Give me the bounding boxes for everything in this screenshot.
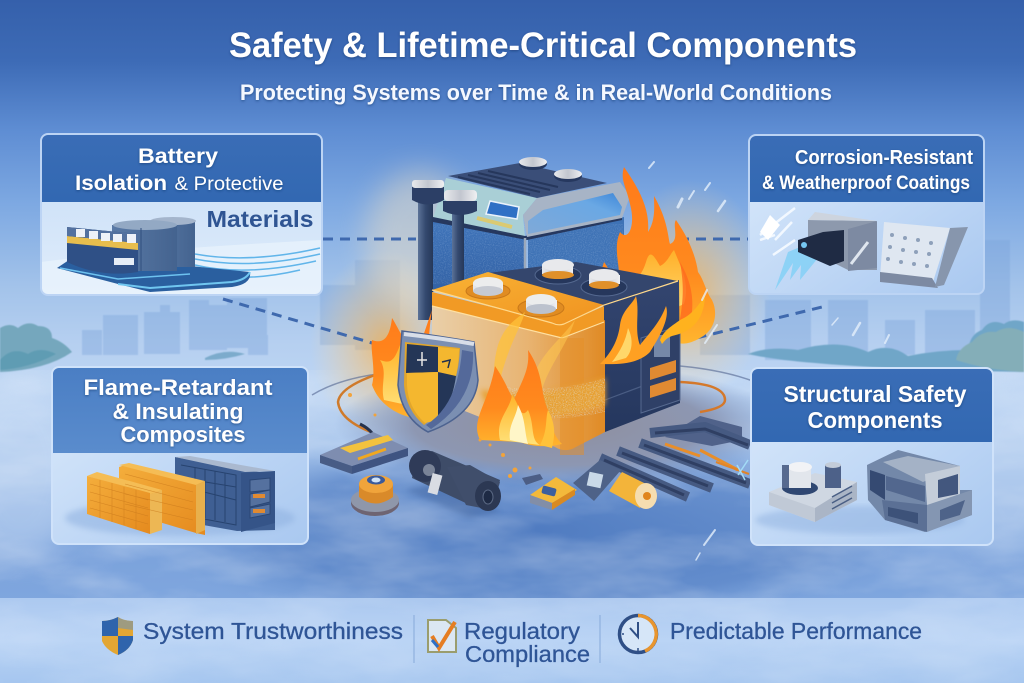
rear battery — [412, 157, 630, 320]
heading — [75, 145, 284, 195]
icon: water spray — [760, 208, 795, 255]
heading — [784, 381, 967, 433]
front battery top — [488, 262, 678, 306]
icon: left safety unit — [769, 473, 857, 522]
heading — [762, 147, 973, 194]
heading: Isolation — [75, 172, 167, 195]
icon: orange insulation panels — [119, 464, 205, 535]
front battery orange faces — [432, 292, 605, 450]
component: cylinder connector — [405, 450, 501, 518]
heading: Flame-Retardant — [84, 375, 273, 400]
benefit: system trustworthiness — [102, 617, 403, 655]
shield — [398, 331, 478, 432]
icon: grey connector box — [808, 220, 877, 270]
icon: perforated plate — [880, 222, 950, 285]
heading: & Protective — [174, 174, 284, 195]
icon: navy composite block — [175, 457, 275, 531]
ground shadow disc — [335, 363, 785, 487]
flames behind front battery — [584, 167, 715, 344]
heading: Components — [808, 407, 942, 433]
icon: clock — [620, 616, 656, 652]
panel body — [749, 135, 984, 294]
icon: right safety unit — [867, 450, 972, 532]
icon: platform — [57, 258, 250, 292]
heading: Composites — [120, 422, 246, 447]
heading — [84, 375, 273, 447]
benefit: predictable performance: Predictable Performance — [670, 618, 922, 644]
benefit: regulatory compliance: Compliance — [465, 641, 590, 667]
rear battery badge — [486, 201, 519, 219]
cable rings — [312, 366, 782, 433]
panel body — [41, 134, 322, 295]
icon: checklist — [428, 620, 456, 652]
footer band — [0, 598, 1024, 683]
panel border — [749, 135, 984, 294]
trees left — [0, 323, 245, 372]
benefit: regulatory compliance: Regulatory — [464, 618, 581, 644]
front battery control panel — [641, 326, 680, 413]
panel border — [751, 368, 993, 545]
rear battery window — [523, 182, 630, 237]
subtitle: Protecting Systems over Time & in Real-World Conditions — [240, 80, 832, 105]
title: Safety & Lifetime-Critical Components — [229, 26, 857, 65]
icon: water waves — [195, 248, 320, 277]
panel: corrosion-resistant coatings — [749, 135, 984, 294]
rear battery posts — [418, 200, 433, 320]
component: plate and yellow cylinder — [573, 460, 657, 509]
component: chip — [522, 474, 577, 510]
component: round button — [351, 475, 399, 516]
panel border — [41, 134, 322, 295]
fire glow behind centre — [310, 170, 770, 440]
benefit: regulatory compliance — [428, 618, 590, 667]
heading continuation: Materials — [206, 206, 314, 232]
heading: & Insulating — [112, 399, 244, 424]
sparks and embers — [348, 393, 532, 478]
benefit: predictable performance — [620, 616, 922, 652]
component: battery module plate — [320, 432, 408, 474]
flames low front — [477, 350, 562, 448]
city skyline silhouette — [82, 240, 1010, 360]
rear battery label collar — [433, 178, 537, 237]
front battery right dark face — [603, 280, 680, 432]
flames on front battery — [494, 296, 705, 398]
dashed connector lines — [223, 239, 826, 343]
rain streaks — [649, 162, 889, 560]
front battery — [432, 259, 680, 455]
panel: battery isolation — [41, 134, 322, 295]
icon: shield — [102, 617, 133, 655]
heading: Structural Safety — [784, 381, 967, 407]
heading: Battery — [138, 145, 218, 168]
icon: battery cells — [177, 222, 195, 267]
rear battery terminals — [519, 158, 547, 170]
panel border — [52, 367, 308, 544]
heading: & Weatherproof Coatings — [762, 173, 970, 194]
rear battery lower faces — [430, 220, 525, 318]
component: rails and wiring — [600, 416, 750, 497]
benefit: system trustworthiness: System Trustworthiness — [143, 618, 403, 644]
front battery terminals — [535, 266, 581, 284]
panel body — [52, 367, 308, 544]
panel body — [751, 368, 993, 545]
flames left — [372, 310, 450, 420]
heading: Corrosion-Resistant — [795, 147, 973, 169]
panel: structural safety components — [751, 368, 993, 545]
trees right — [748, 320, 1024, 372]
panel: flame-retardant composites — [52, 367, 308, 544]
rear battery top plate — [448, 163, 607, 198]
